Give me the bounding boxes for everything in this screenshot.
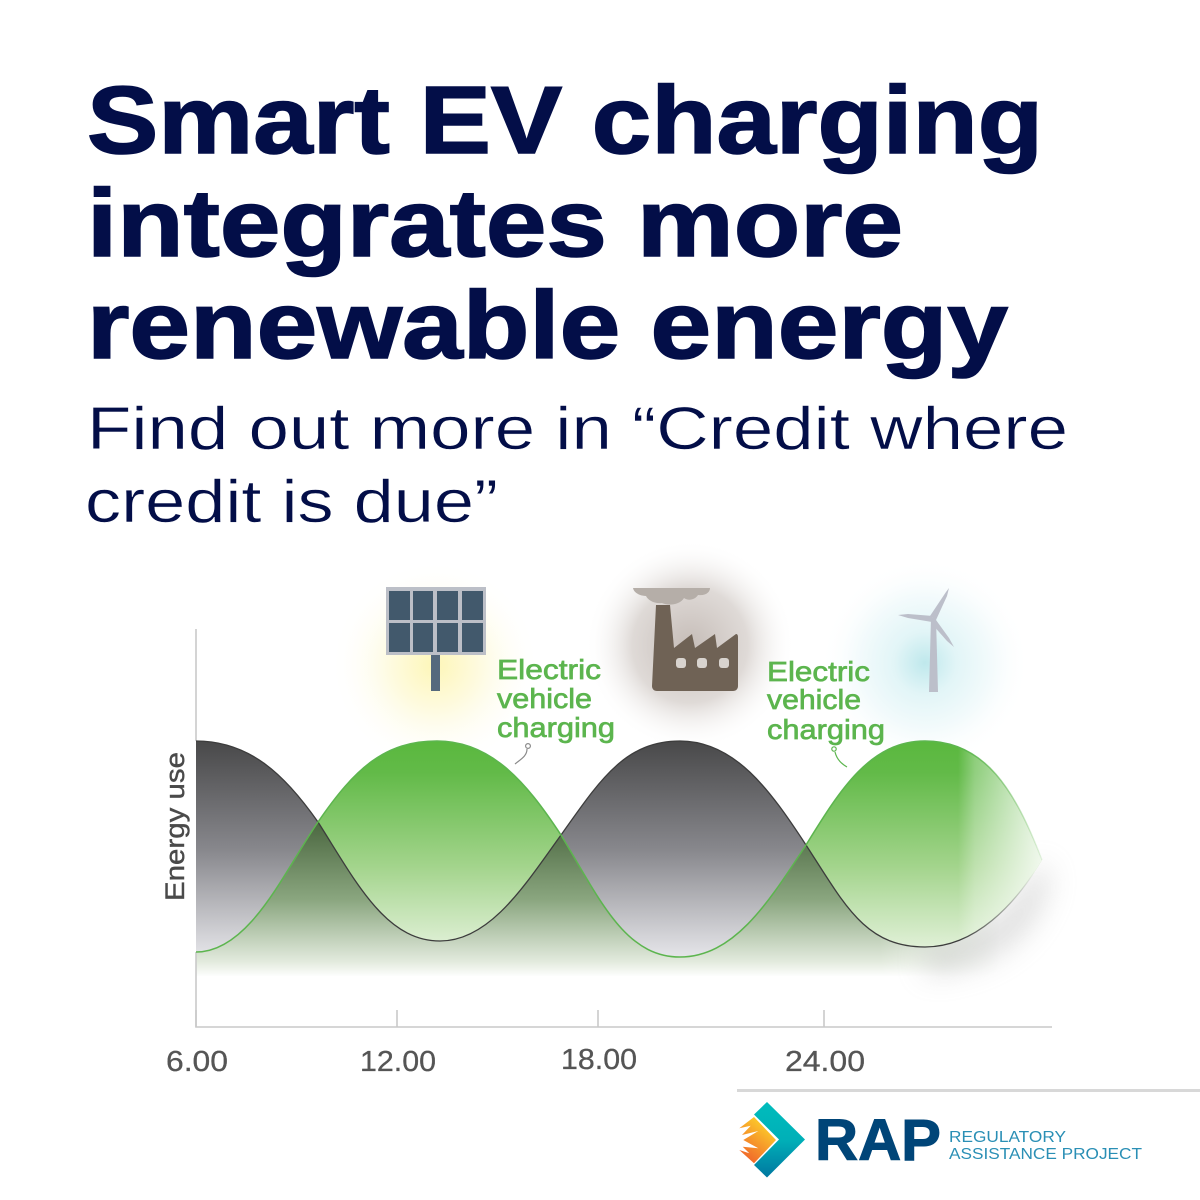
black curve: [196, 741, 925, 947]
dark overlap area: [196, 824, 986, 976]
logo mark: [739, 1102, 805, 1178]
icon: solar panel with yellow glow: [330, 560, 540, 770]
title: [87, 67, 1043, 379]
subtitle: credit is due”: [85, 468, 498, 535]
icon: factory with smoke: [585, 540, 795, 750]
shadow under right lobe: [925, 860, 1050, 975]
x axis labels: 6.00: [166, 1046, 228, 1078]
x axis labels: 18.00: [561, 1044, 637, 1076]
axes: [196, 629, 1052, 1027]
label: electric vehicle charging 2: vehicle: [767, 684, 861, 715]
logo tagline: ASSISTANCE PROJECT: [949, 1146, 1143, 1163]
label: electric vehicle charging 2: [767, 656, 885, 745]
subtitle: Find out more in “Credit where: [87, 395, 1068, 462]
x axis labels: 24.00: [785, 1046, 865, 1078]
chart: energy use over the day: [160, 540, 1052, 1078]
black curve fading end: [925, 860, 1042, 947]
logo tagline: REGULATORY: [949, 1129, 1066, 1146]
label: electric vehicle charging 2: charging: [767, 714, 885, 745]
title: renewable energy: [87, 272, 1008, 379]
callout pointer 1: [515, 744, 530, 764]
y axis label: Energy use: [160, 752, 190, 901]
logo: Regulatory Assistance Project: [739, 1102, 1143, 1178]
label: electric vehicle charging 1: [497, 654, 615, 743]
x axis labels: 12.00: [360, 1046, 436, 1078]
label: electric vehicle charging 1: Electric: [497, 654, 601, 685]
green renewable generation area: [318, 742, 560, 940]
label: electric vehicle charging 2: Electric: [767, 656, 870, 687]
icon: wind turbine with blue glow: [820, 558, 1030, 768]
footer divider: [737, 1089, 1200, 1092]
green curve: [196, 741, 925, 957]
label: electric vehicle charging 1: vehicle: [497, 683, 592, 714]
subtitle: [85, 395, 1068, 535]
logo wordmark: RAP: [815, 1108, 941, 1173]
right green lobe: [806, 741, 1042, 947]
title: Smart EV charging: [87, 67, 1043, 174]
x axis labels: [166, 1044, 865, 1078]
grey fossil generation area: [196, 741, 806, 976]
label: electric vehicle charging 1: charging: [497, 712, 615, 743]
logo tagline: [949, 1129, 1143, 1163]
green curve fading end: [925, 741, 1042, 860]
callout pointer 2: [832, 747, 847, 767]
right fade overlay: [960, 749, 1042, 936]
title: integrates more: [87, 170, 903, 277]
